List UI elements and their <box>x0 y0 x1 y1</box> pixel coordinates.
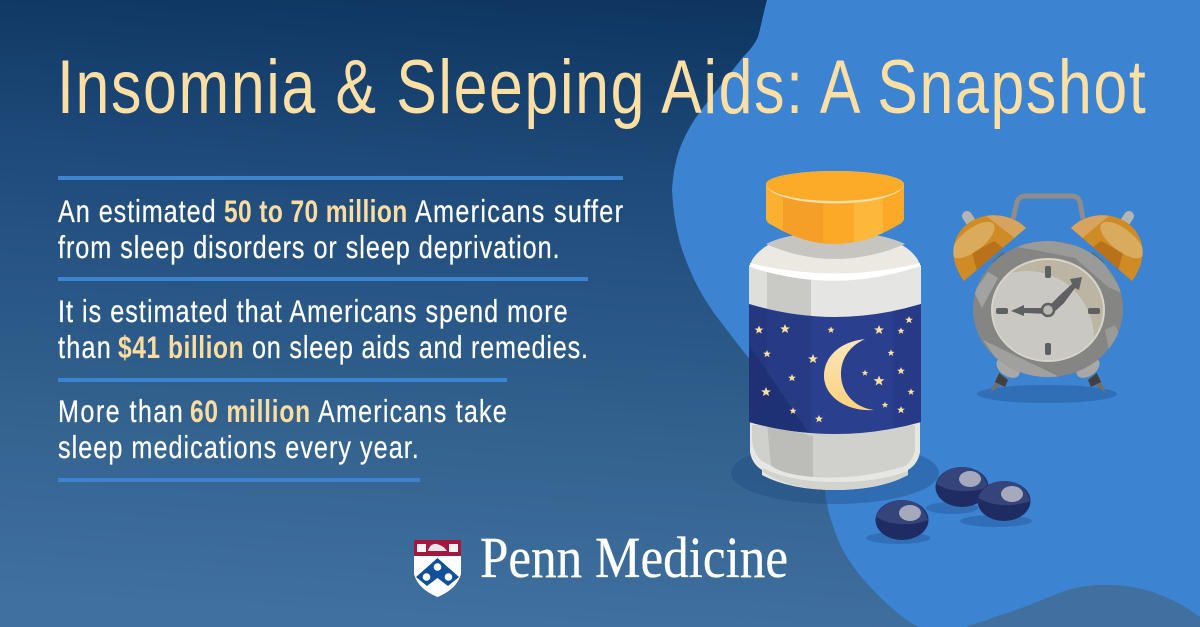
rule 2 <box>58 277 588 281</box>
icon: pill bottle <box>749 171 921 490</box>
bottle shoulder <box>749 230 921 305</box>
bottle label <box>749 304 921 434</box>
pill 3 <box>978 481 1030 521</box>
bottle shadow <box>731 442 939 504</box>
pill shadows <box>866 502 1032 544</box>
blue blob <box>672 0 1200 627</box>
logo wordmark: Penn Medicine <box>480 525 788 590</box>
stat text: spending: on sleep aids and remedies. <box>252 330 588 366</box>
stat text: spending: than <box>58 330 111 366</box>
bottom wave <box>965 585 1200 627</box>
pill 1 <box>876 500 928 540</box>
stat text: sleep disorders: Americans suffer <box>415 194 623 230</box>
clock body <box>973 241 1123 377</box>
pill 2 <box>936 467 988 507</box>
stat text: spending: $41 billion <box>118 329 244 365</box>
stat text: medications: More than <box>58 394 183 430</box>
rule 4 <box>58 478 420 482</box>
logo shield <box>414 540 461 597</box>
title: Insomnia & Sleeping Aids: A Snapshot <box>57 45 1146 130</box>
stars <box>755 316 915 422</box>
stat text: sleep disorders: from sleep disorders or sleep deprivation. <box>58 230 560 266</box>
rule 3 <box>58 378 507 382</box>
rule 1 <box>58 176 623 180</box>
stat text: medications: sleep medications every year. <box>58 430 419 466</box>
logo: Penn Medicine <box>414 536 786 597</box>
moon <box>824 339 874 410</box>
left bell <box>953 215 1026 281</box>
icon: alarm clock <box>945 196 1152 405</box>
right bell <box>1071 215 1143 281</box>
stat text: spending: It is estimated that Americans spend more <box>58 294 568 330</box>
bottle cap <box>766 171 904 244</box>
stat text: sleep disorders <box>58 193 623 266</box>
stat text: spending <box>58 294 588 366</box>
icon: pills <box>876 467 1030 540</box>
stat text: sleep disorders: 50 to 70 million <box>224 193 407 229</box>
stat text: sleep disorders: An estimated <box>58 194 216 230</box>
bottle lower section <box>750 420 920 490</box>
bottle upper band <box>749 265 921 318</box>
stat text: medications: Americans take <box>318 394 507 430</box>
stat text: medications <box>58 393 507 466</box>
stat text: medications: 60 million <box>190 393 310 429</box>
